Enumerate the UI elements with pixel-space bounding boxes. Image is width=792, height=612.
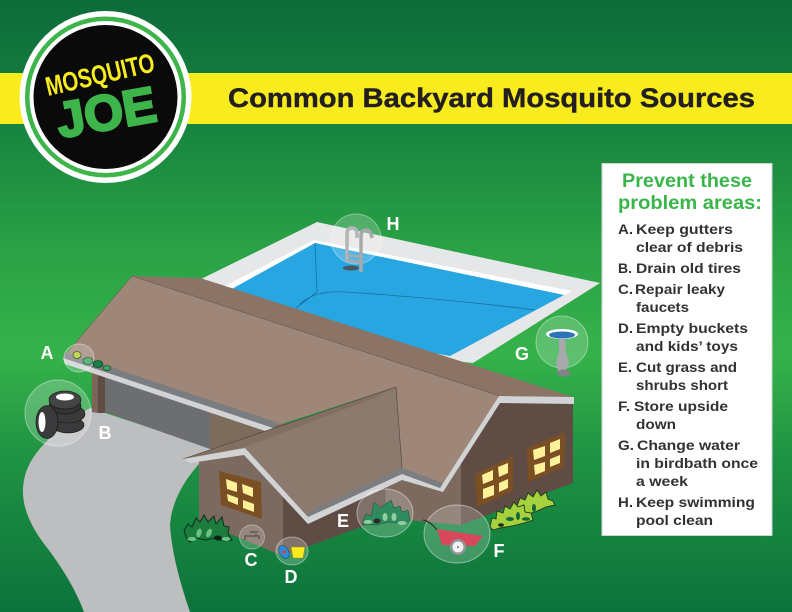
yellow title band xyxy=(0,73,792,124)
shrubs: yellow-green xyxy=(490,490,555,530)
item H: Keep swimming xyxy=(636,494,755,510)
bubble H: pool ladder xyxy=(331,214,381,272)
label E: E xyxy=(337,511,349,531)
window: right wall left xyxy=(475,456,513,507)
bubble D: bucket and toy xyxy=(276,537,308,565)
item G xyxy=(618,437,758,489)
logo: Mosquito Joe xyxy=(20,11,192,183)
item H: H. xyxy=(618,494,633,510)
label C: C xyxy=(244,550,258,570)
panel heading: Prevent these xyxy=(622,171,752,192)
bubble G: birdbath xyxy=(536,316,588,376)
item G: in birdbath once xyxy=(636,455,758,471)
item F xyxy=(618,398,728,432)
bubble C: leaky faucet xyxy=(240,525,264,549)
item E: shrubs short xyxy=(636,377,728,393)
item C: Repair leaky xyxy=(635,281,725,297)
panel: prevent these problem areas xyxy=(602,164,772,536)
label A: A xyxy=(40,343,54,363)
label B: B xyxy=(98,423,112,443)
item C: C. xyxy=(618,281,633,297)
item A: clear of debris xyxy=(636,239,743,255)
item F: down xyxy=(636,416,676,432)
item F: F. xyxy=(618,398,630,414)
bubble F: wheelbarrow xyxy=(423,505,490,563)
main roof xyxy=(66,276,573,484)
front gable roof xyxy=(183,387,402,518)
garage xyxy=(92,365,290,470)
item H xyxy=(618,494,755,528)
label F: F xyxy=(494,541,504,561)
gutter: main eave xyxy=(63,352,279,432)
item B: Drain old tires xyxy=(636,260,741,276)
swimming pool xyxy=(197,222,600,363)
item G: G. xyxy=(618,437,634,453)
bubble B: old tires xyxy=(25,380,91,446)
item E: E. xyxy=(618,359,632,375)
item G: Change water xyxy=(637,437,741,453)
item E: Cut grass and xyxy=(636,359,737,375)
label G: G xyxy=(515,344,529,364)
item D: D. xyxy=(618,320,633,336)
item E xyxy=(618,359,737,393)
item C: faucets xyxy=(636,299,689,315)
house walls xyxy=(199,395,573,556)
bubble A: gutter debris xyxy=(64,344,111,372)
label D: D xyxy=(284,567,298,587)
gutters and fascia xyxy=(183,396,574,524)
shrub: front xyxy=(184,515,232,542)
item D xyxy=(618,320,748,354)
logo: Mosquito Joe: MOSQUITO xyxy=(43,48,158,102)
window: right wall right xyxy=(527,432,565,482)
bubble E: overgrown shrub xyxy=(357,489,413,537)
item A: A. xyxy=(618,221,633,237)
window: front gable xyxy=(219,471,262,519)
label H: H xyxy=(386,214,400,234)
item G: a week xyxy=(636,473,688,489)
item D: and kids’ toys xyxy=(636,338,738,354)
item D: Empty buckets xyxy=(636,320,748,336)
item A xyxy=(618,221,743,255)
driveway xyxy=(23,408,215,612)
title: Common Backyard Mosquito Sources xyxy=(228,83,755,113)
item C xyxy=(618,281,725,315)
item H: pool clean xyxy=(636,512,713,528)
panel heading: problem areas: xyxy=(618,193,762,214)
item A: Keep gutters xyxy=(636,221,733,237)
item F: Store upside xyxy=(634,398,728,414)
item B: B. xyxy=(618,260,632,276)
logo: Mosquito Joe: JOE xyxy=(52,76,160,149)
panel heading xyxy=(618,171,762,214)
